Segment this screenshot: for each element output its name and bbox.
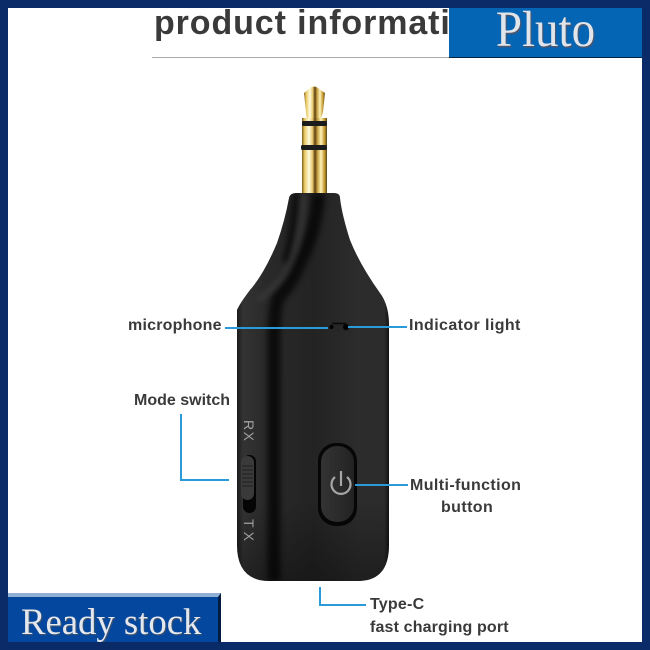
callout: multi-function button <box>355 477 521 516</box>
banner: Pluto: Pluto <box>496 2 595 58</box>
multi-function power button <box>318 443 357 526</box>
callout: type-c fast charging port: Type-C <box>370 596 424 613</box>
callout: indicator light: Indicator light <box>409 317 521 334</box>
callout: multi-function button: button <box>441 499 493 516</box>
banner: Ready stock: Ready stock <box>21 601 201 642</box>
mode switch <box>241 420 257 542</box>
callout: type-c fast charging port: fast charging port <box>370 619 509 636</box>
callout: type-c fast charging port <box>319 587 509 636</box>
device body <box>237 193 389 581</box>
callout: multi-function button: Multi-function <box>410 477 521 494</box>
banner: Pluto <box>449 8 642 58</box>
product illustration: audio adapter <box>237 86 389 581</box>
callout: microphone: microphone <box>128 317 222 334</box>
mode switch: TX <box>241 519 257 542</box>
mode switch: RX <box>241 420 257 442</box>
icon: gold audio jack <box>301 86 327 194</box>
indicator and microphone holes <box>328 322 350 332</box>
callout: mode switch: Mode switch <box>134 392 230 409</box>
